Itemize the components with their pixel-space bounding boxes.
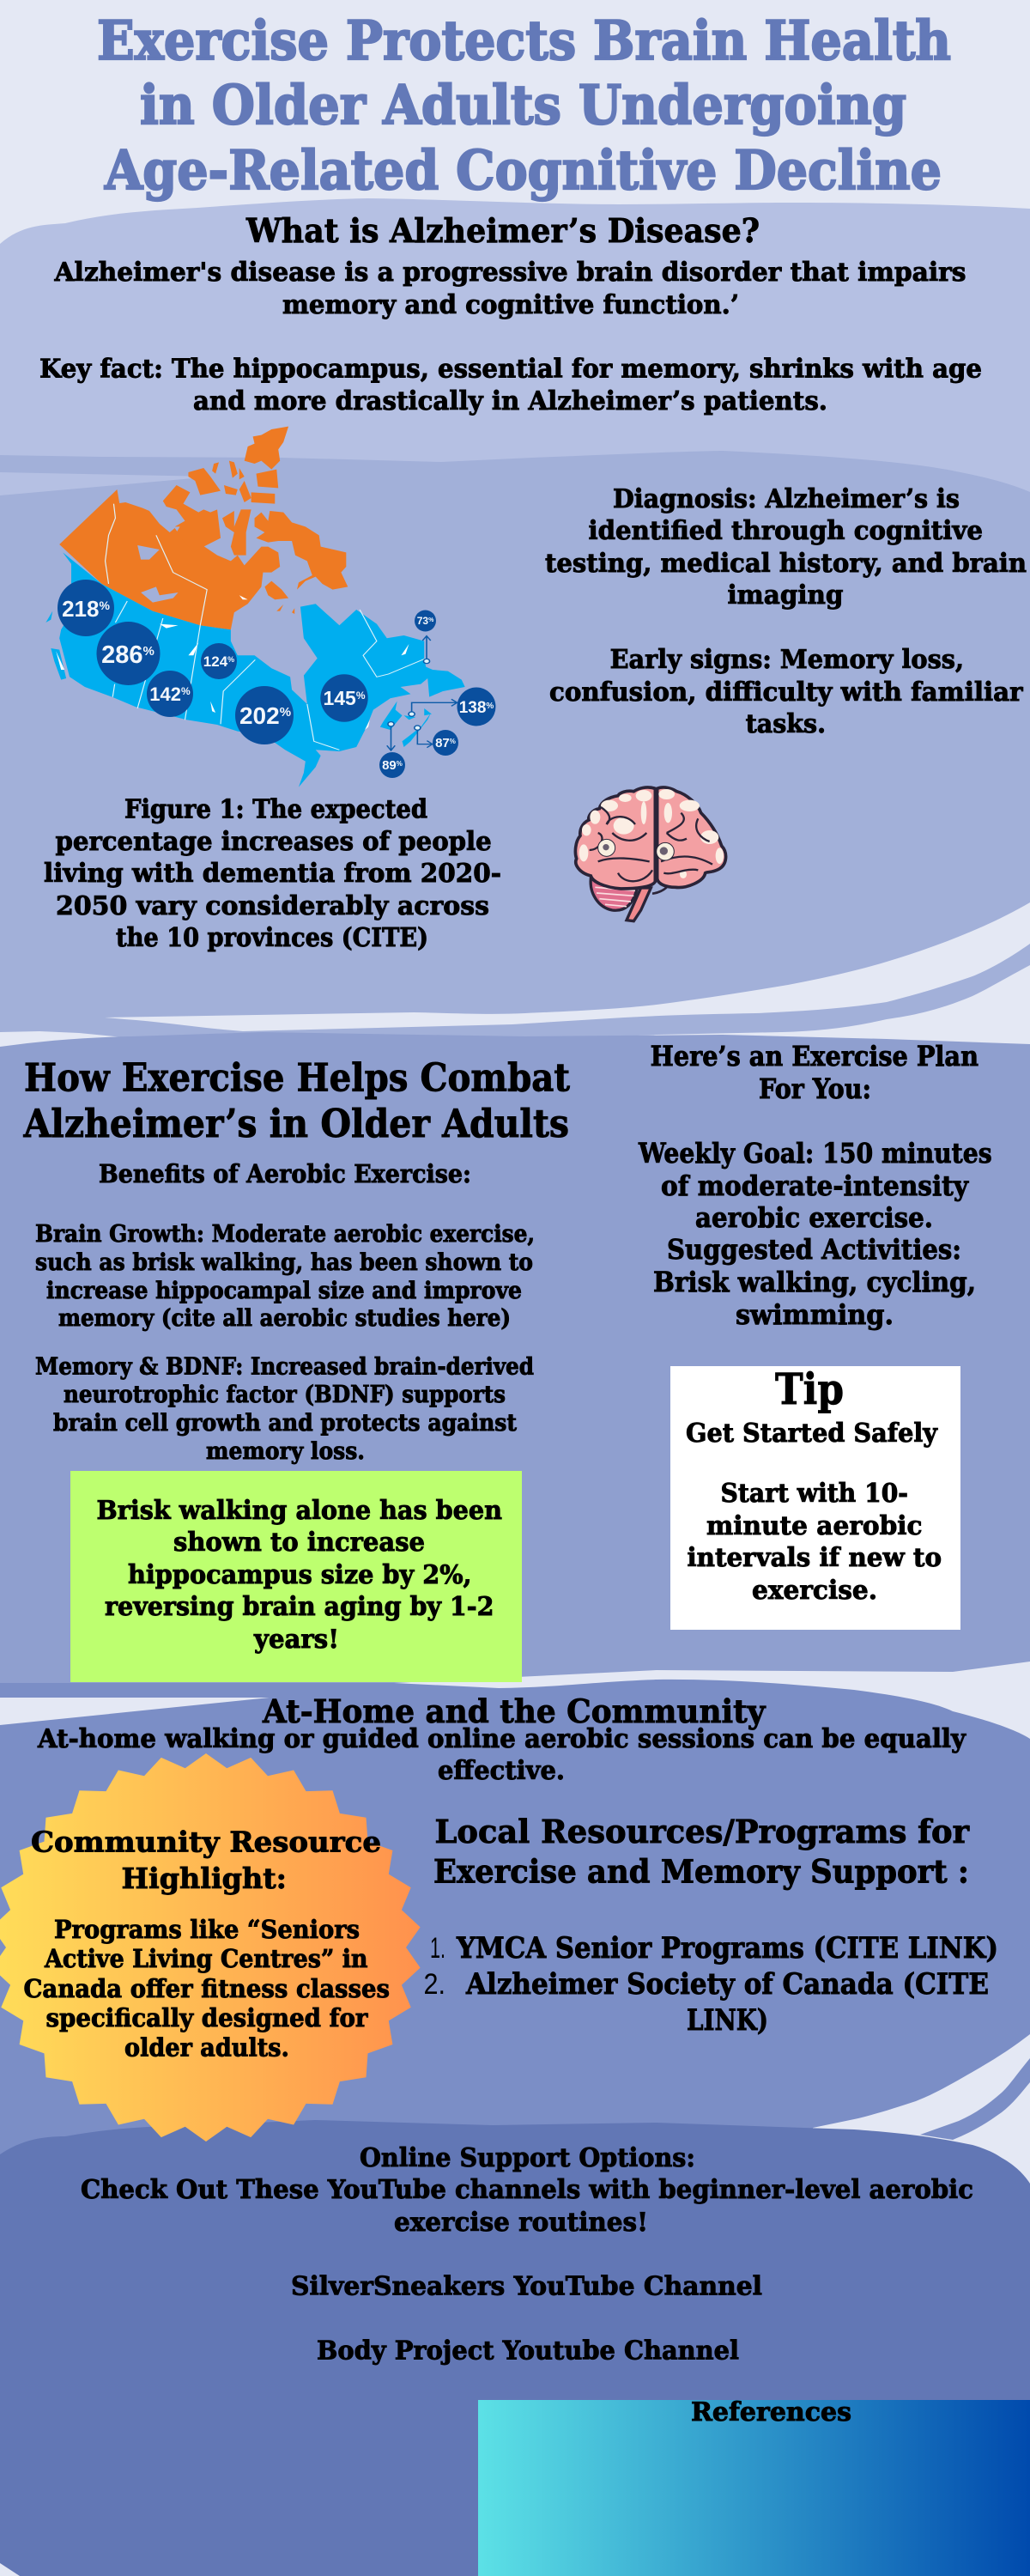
text block: diagnosis and early signs: testing, medical history, and brain — [545, 549, 1027, 579]
callout: community resource starburst: older adults. — [124, 2033, 289, 2063]
panel: what is Alzheimer's background — [0, 198, 1030, 550]
text block: online support options: Check Out These YouTube channels with beginner-level aerobic — [81, 2175, 973, 2205]
map: bubble labels: 202 — [239, 702, 280, 729]
text block: online support options: Online Support Options: — [360, 2143, 695, 2173]
map: bubble labels: 218 — [62, 596, 99, 622]
text block: definition and key fact: and more drastically in Alzheimer’s patients. — [193, 386, 827, 416]
text block: online support options: Body Project Youtube Channel — [317, 2336, 739, 2366]
callout: tip: Start with 10- — [721, 1479, 908, 1509]
text block: local resources: LINK) — [687, 2003, 768, 2038]
text block: benefits of aerobic exercise: neurotrophic factor (BDNF) supports — [64, 1382, 506, 1408]
map: bubble labels: % — [428, 617, 434, 623]
panel: diagnosis and map background — [0, 451, 1030, 1052]
icon: brain — [575, 787, 726, 921]
text block: benefits of aerobic exercise: increase hippocampal size and improve — [46, 1278, 522, 1304]
text block: online support options: exercise routines! — [394, 2208, 648, 2238]
callout: community resource starburst: Active Living Centres” in — [44, 1944, 368, 1973]
text block: benefits of aerobic exercise: Brain Growth: Moderate aerobic exercise, — [35, 1221, 535, 1248]
text block: definition and key fact: memory and cognitive function.’ — [282, 290, 739, 320]
map: bubble labels: % — [397, 760, 403, 768]
callout: community resource starburst: Community Resource — [31, 1826, 381, 1858]
icon: white highlights — [579, 789, 724, 878]
text block: exercise plan: Here’s an Exercise Plan — [651, 1040, 978, 1072]
map: bubble labels: 145 — [323, 687, 356, 709]
map: bubble labels: 142 — [149, 683, 181, 705]
text block: diagnosis and early signs: imaging — [728, 580, 844, 611]
map: southampton island — [264, 581, 294, 614]
text block: local resources: 1. — [430, 1932, 445, 1965]
text block: figure caption: the 10 provinces (CITE) — [116, 923, 428, 953]
band wedge — [0, 472, 212, 495]
curved stripe — [920, 2058, 1030, 2140]
map: bubble labels: % — [143, 644, 154, 659]
text block: diagnosis and early signs — [545, 484, 1027, 739]
icon: cerebellum — [591, 878, 637, 910]
text block: benefits of aerobic exercise — [35, 1159, 535, 1465]
map: bubble labels: % — [99, 598, 110, 612]
text block: benefits of aerobic exercise: such as brisk walking, has been shown to — [35, 1249, 533, 1276]
map: northern lakes — [137, 545, 179, 603]
callout: brisk walking fact: Brisk walking alone has been — [96, 1496, 502, 1526]
panel: at-home and community background — [0, 1680, 1030, 2172]
text block: exercise plan — [638, 1040, 992, 1331]
icon: left hemisphere — [575, 787, 655, 889]
map: prince of wales and somerset — [222, 509, 251, 556]
text block: online support options — [81, 2143, 973, 2366]
panel: references: References — [691, 2397, 851, 2427]
callout: community resource starburst: Canada offer fitness classes — [24, 1974, 390, 2003]
text block: diagnosis and early signs: identified through cognitive — [589, 516, 983, 546]
callout: brisk walking fact — [70, 1471, 522, 1682]
callout: brisk walking fact: hippocampus size by 2%, — [128, 1560, 472, 1590]
text block: exercise plan: Suggested Activities: — [667, 1233, 961, 1266]
text block: diagnosis and early signs: confusion, difficulty with familiar — [549, 677, 1024, 708]
text block: figure caption: Figure 1: The expected — [124, 795, 427, 825]
panel: online support background — [0, 2120, 1030, 2576]
heading: how exercise helps: Alzheimer’s in Older Adults — [23, 1101, 569, 1146]
map: bubble labels: % — [280, 705, 291, 720]
text block: exercise plan: For You: — [759, 1072, 871, 1105]
text block: at-home walking: At-home walking or guided online aerobic sessions can be equally — [37, 1724, 967, 1754]
map: southern provinces — [59, 552, 465, 787]
map: baffin island — [255, 511, 348, 590]
panel: how exercise helps background — [0, 1032, 1030, 1683]
callout: brisk walking fact: reversing brain aging by 1-2 — [105, 1592, 494, 1622]
text block: local resources: Local Resources/Programs for — [434, 1813, 969, 1850]
callout: tip: Tip — [775, 1364, 844, 1414]
map: projected dementia increases across Canada — [45, 427, 495, 787]
title: Exercise Protects Brain Health — [97, 9, 951, 72]
map: bubble labels: 124 — [203, 653, 227, 670]
title — [97, 9, 951, 202]
text block: figure caption: living with dementia from 2020- — [44, 859, 501, 889]
heading: what is Alzheimer's: What is Alzheimer’s Disease? — [245, 211, 760, 250]
panel: references — [478, 2397, 1030, 2576]
callout: tip — [670, 1364, 960, 1630]
heading: how exercise helps — [23, 1054, 570, 1146]
map: bubble labels: 89 — [382, 758, 397, 773]
text block: benefits of aerobic exercise: Benefits of Aerobic Exercise: — [99, 1159, 471, 1188]
light wedge left — [0, 1031, 123, 1052]
text block: benefits of aerobic exercise: brain cell growth and protects against — [53, 1410, 517, 1437]
callout: tip: intervals if new to — [687, 1543, 942, 1573]
text block: at-home walking: effective. — [438, 1756, 565, 1786]
icon: hippocampus markers — [598, 839, 615, 856]
text block: exercise plan: Brisk walking, cycling, — [653, 1266, 976, 1298]
map: provincial borders — [106, 504, 426, 750]
callout: community resource starburst: Programs like “Seniors — [54, 1915, 360, 1944]
text block: definition and key fact: Alzheimer's disease is a progressive brain disorder that impairs — [54, 258, 966, 288]
callout: brisk walking fact: years! — [253, 1625, 339, 1655]
map: bubble labels — [62, 596, 494, 773]
text block: local resources: 2. — [424, 1968, 445, 2001]
icon: right hemisphere — [657, 787, 726, 888]
map: bubble labels: 73 — [417, 615, 428, 627]
heading: how exercise helps: How Exercise Helps Combat — [24, 1054, 570, 1101]
callout: community resource starburst — [0, 1753, 421, 2142]
map: bubble labels: % — [356, 690, 366, 702]
map: callout connectors — [387, 636, 457, 750]
map: bubble labels: % — [450, 738, 456, 745]
text block: definition and key fact — [39, 258, 982, 416]
callout: tip: exercise. — [752, 1576, 877, 1606]
map: bubble labels: 138 — [459, 699, 486, 717]
text block: diagnosis and early signs: Diagnosis: Alzheimer’s is — [613, 484, 960, 514]
text block: exercise plan: of moderate-intensity — [661, 1170, 969, 1202]
text block: exercise plan: Weekly Goal: 150 minutes — [638, 1137, 992, 1170]
text block: figure caption: 2050 vary considerably across — [56, 891, 489, 921]
map: victoria island — [163, 485, 221, 552]
text block: local resources — [424, 1813, 998, 2038]
text block: at-home walking — [37, 1724, 967, 1786]
title: in Older Adults Undergoing — [140, 73, 906, 137]
heading: at-home and community: At-Home and the Community — [262, 1692, 766, 1730]
text block: definition and key fact: Key fact: The hippocampus, essential for memory, shrinks with age — [39, 354, 982, 385]
light stripe — [105, 902, 1030, 1031]
text block: benefits of aerobic exercise: Memory & BDNF: Increased brain-derived — [35, 1354, 534, 1381]
callout: tip: minute aerobic — [706, 1511, 922, 1541]
text block: online support options: SilverSneakers YouTube Channel — [291, 2272, 762, 2301]
text block: benefits of aerobic exercise: memory (cite all aerobic studies here) — [58, 1305, 511, 1332]
light wedge community — [0, 1698, 270, 1725]
callout: community resource starburst: specifically designed for — [46, 2003, 368, 2032]
map: bubble labels: % — [486, 702, 494, 711]
text block: exercise plan: swimming. — [736, 1298, 894, 1331]
icon: brain stem — [627, 888, 651, 921]
callout: community resource starburst: Highlight: — [122, 1862, 287, 1895]
map: maritime provinces — [380, 702, 432, 747]
text block: local resources: Exercise and Memory Support : — [433, 1853, 969, 1891]
text block: figure caption — [44, 795, 501, 953]
text block: diagnosis and early signs: tasks. — [746, 709, 826, 739]
map: high arctic islands — [188, 427, 288, 504]
icon: brain folds — [590, 807, 712, 881]
text block: figure caption: percentage increases of people — [55, 827, 492, 857]
map: bubble labels: 87 — [435, 736, 450, 750]
callout: brisk walking fact: shown to increase — [173, 1528, 425, 1558]
map: percentage bubbles — [58, 580, 496, 778]
map: white lakes — [56, 595, 409, 730]
map: bubble labels: % — [227, 655, 234, 664]
map: bubble labels: % — [181, 685, 191, 697]
text block: local resources: Alzheimer Society of Canada (CITE — [465, 1967, 989, 2002]
callout: tip: Get Started Safely — [686, 1419, 938, 1449]
text block: exercise plan: aerobic exercise. — [695, 1201, 933, 1234]
map: bubble labels: 286 — [101, 641, 143, 669]
text block: diagnosis and early signs: Early signs: Memory loss, — [610, 645, 964, 675]
text block: benefits of aerobic exercise: memory loss. — [206, 1438, 365, 1465]
title: Age-Related Cognitive Decline — [104, 138, 942, 202]
map: northern territories mainland — [59, 489, 280, 629]
map: vancouver island and haida gwaii — [45, 611, 66, 680]
